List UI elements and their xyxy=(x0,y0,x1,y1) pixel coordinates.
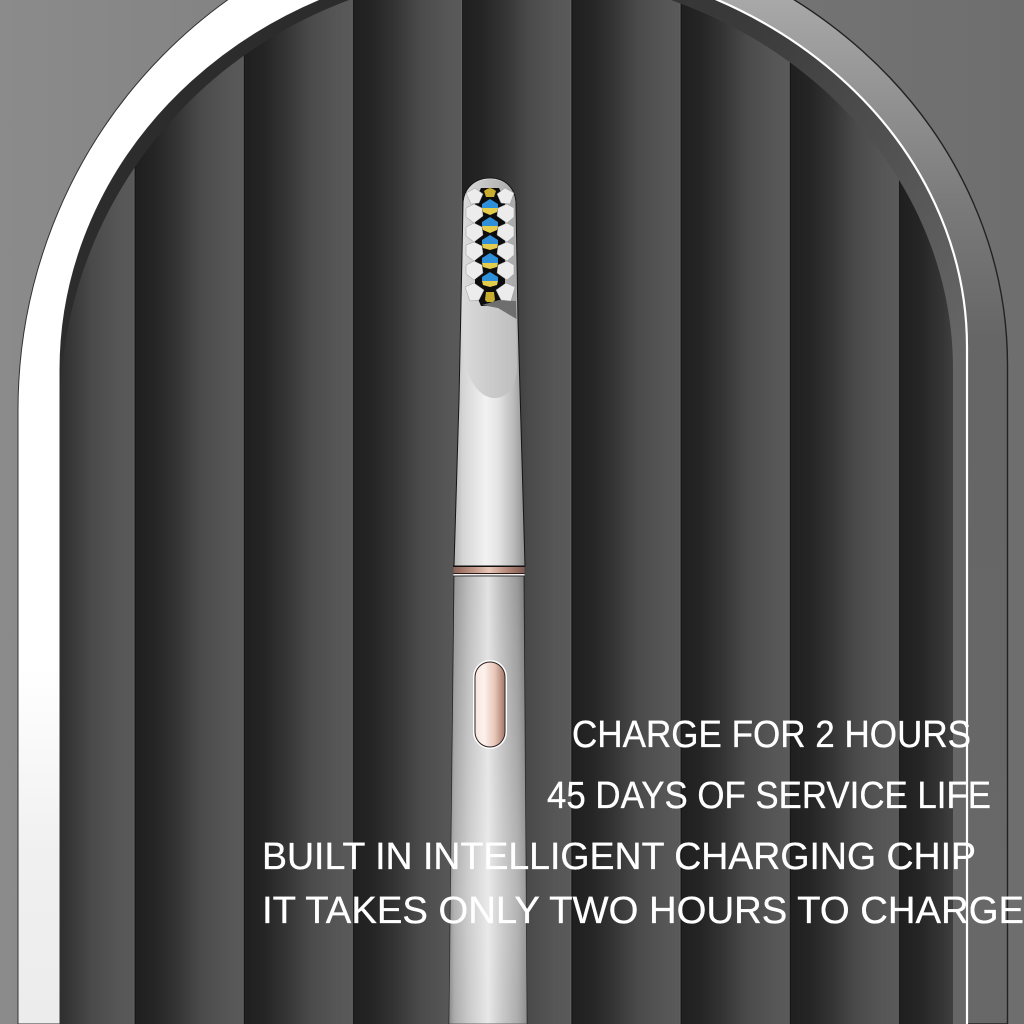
dark slope under head xyxy=(482,300,516,319)
bristle bed xyxy=(475,188,505,306)
left white bristles xyxy=(465,188,484,301)
metallic right arch band xyxy=(512,0,1008,1024)
neck scoop xyxy=(462,296,517,398)
right white bristles xyxy=(496,188,515,301)
blue and yellow centre bristles xyxy=(482,199,498,287)
white left arch band xyxy=(18,0,511,1024)
copper ring xyxy=(453,566,525,576)
thin white highlight line xyxy=(512,0,967,1024)
line: charge for 2 hours: CHARGE FOR 2 HOURS xyxy=(572,714,971,756)
line: it takes only two hours to charge: IT TAKES ONLY TWO HOURS TO CHARGE xyxy=(262,890,1024,932)
yellow end tufts xyxy=(484,188,496,302)
line: 45 days of service life: 45 DAYS OF SERVICE LIFE xyxy=(547,775,991,817)
toothbrush xyxy=(449,178,527,1024)
power button xyxy=(473,660,507,749)
handle xyxy=(449,576,527,1024)
line: built in intelligent charging chip: BUILT IN INTELLIGENT CHARGING CHIP xyxy=(262,836,976,878)
caption text block xyxy=(262,714,1024,932)
brush neck xyxy=(454,178,525,566)
brush head plate xyxy=(463,179,516,318)
